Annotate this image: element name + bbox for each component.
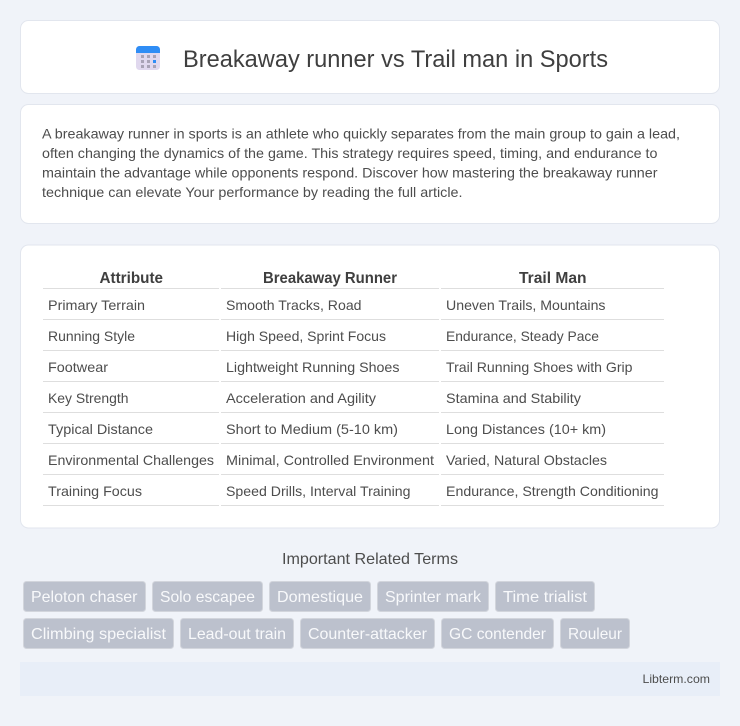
table row: Key Strength: Stamina and Stability — [446, 390, 581, 406]
table row: Key Strength — [43, 390, 664, 413]
table row: Typical Distance: Typical Distance — [48, 421, 153, 437]
tag: GC contender: GC contender — [449, 626, 547, 643]
table row: Training Focus: Training Focus — [48, 483, 142, 499]
table row: Running Style: Running Style — [48, 328, 135, 344]
tag: Peloton chaser: Peloton chaser — [31, 589, 138, 606]
table row: Primary Terrain: Uneven Trails, Mountains — [446, 297, 606, 313]
tag: Counter-attacker: Counter-attacker — [308, 626, 428, 643]
table row: Training Focus: Endurance, Strength Conditioning — [446, 483, 658, 499]
tag: Climbing specialist — [24, 618, 174, 648]
table row: Key Strength: Acceleration and Agility — [226, 390, 376, 406]
tag: Sprinter mark — [378, 582, 488, 612]
text block: description paragraph: A breakaway runner in sports is an athlete who quickly separates from the main group to gain a lead, — [42, 126, 680, 142]
table row: Environmental Challenges: Environmental Challenges — [48, 452, 214, 468]
tag: Counter-attacker — [300, 618, 434, 648]
text block: description paragraph: maintain the advantage while opponents respond. Discover how mastering the breakaway runner — [42, 164, 658, 180]
footer bar — [20, 662, 720, 696]
table header row: Attribute — [100, 270, 163, 287]
tag: GC contender — [442, 618, 554, 648]
table row: Primary Terrain: Smooth Tracks, Road — [226, 297, 362, 313]
table row: Primary Terrain: Primary Terrain — [48, 297, 145, 313]
tag: Solo escapee: Solo escapee — [160, 589, 255, 606]
tag: Lead-out train: Lead-out train — [188, 626, 286, 643]
tag: Peloton chaser — [24, 582, 146, 612]
footer source text: Libterm.com — [642, 672, 710, 686]
table row: Environmental Challenges — [43, 452, 664, 475]
heading: important related terms: Important Related Terms — [282, 551, 458, 568]
table row: Running Style: High Speed, Sprint Focus — [226, 328, 386, 344]
panel: comparison table — [20, 245, 720, 528]
icon: calendar — [136, 46, 160, 70]
text block: description paragraph: technique can elevate Your performance by reading the full article. — [42, 184, 462, 200]
tag: Time trialist: Time trialist — [503, 589, 588, 606]
tag: Rouleur — [560, 618, 630, 648]
table row: Primary Terrain — [43, 297, 664, 320]
panel: header — [20, 20, 720, 94]
table row: Training Focus — [43, 483, 664, 506]
table row: Environmental Challenges: Varied, Natural Obstacles — [446, 452, 607, 468]
tag: Rouleur: Rouleur — [568, 626, 623, 643]
table row: Typical Distance: Long Distances (10+ km) — [446, 421, 606, 437]
tag: Domestique — [270, 582, 370, 612]
tag: Climbing specialist: Climbing specialist — [31, 626, 167, 643]
table row: Typical Distance — [43, 421, 664, 444]
table row: Typical Distance: Short to Medium (5-10 km) — [226, 421, 398, 437]
tag: Sprinter mark: Sprinter mark — [385, 589, 482, 606]
table header row: Trail Man — [519, 270, 586, 287]
table header row — [43, 270, 664, 289]
table row: Footwear — [43, 359, 664, 382]
table row: Footwear: Footwear — [48, 359, 108, 375]
table header row: Breakaway Runner — [263, 270, 397, 287]
text block: description paragraph — [42, 126, 680, 200]
table row: Running Style: Endurance, Steady Pace — [446, 328, 599, 344]
tag: Solo escapee — [152, 582, 262, 612]
table row: Footwear: Lightweight Running Shoes — [226, 359, 400, 375]
table row: Key Strength: Key Strength — [48, 390, 128, 406]
tag group: related terms — [24, 582, 630, 648]
tag: Time trialist — [496, 582, 594, 612]
tag: Domestique: Domestique — [277, 589, 363, 606]
table row: Footwear: Trail Running Shoes with Grip — [446, 359, 633, 375]
text block: description paragraph: often changing the dynamics of the game. This strategy requires speed, timing, and endurance to — [42, 145, 658, 161]
tag: Lead-out train — [180, 618, 294, 648]
table row: Running Style — [43, 328, 664, 351]
table row: Training Focus: Speed Drills, Interval Training — [226, 483, 410, 499]
title: Breakaway runner vs Trail man in Sports — [183, 46, 608, 73]
table row: Environmental Challenges: Minimal, Controlled Environment — [226, 452, 434, 468]
panel: description — [20, 104, 720, 224]
